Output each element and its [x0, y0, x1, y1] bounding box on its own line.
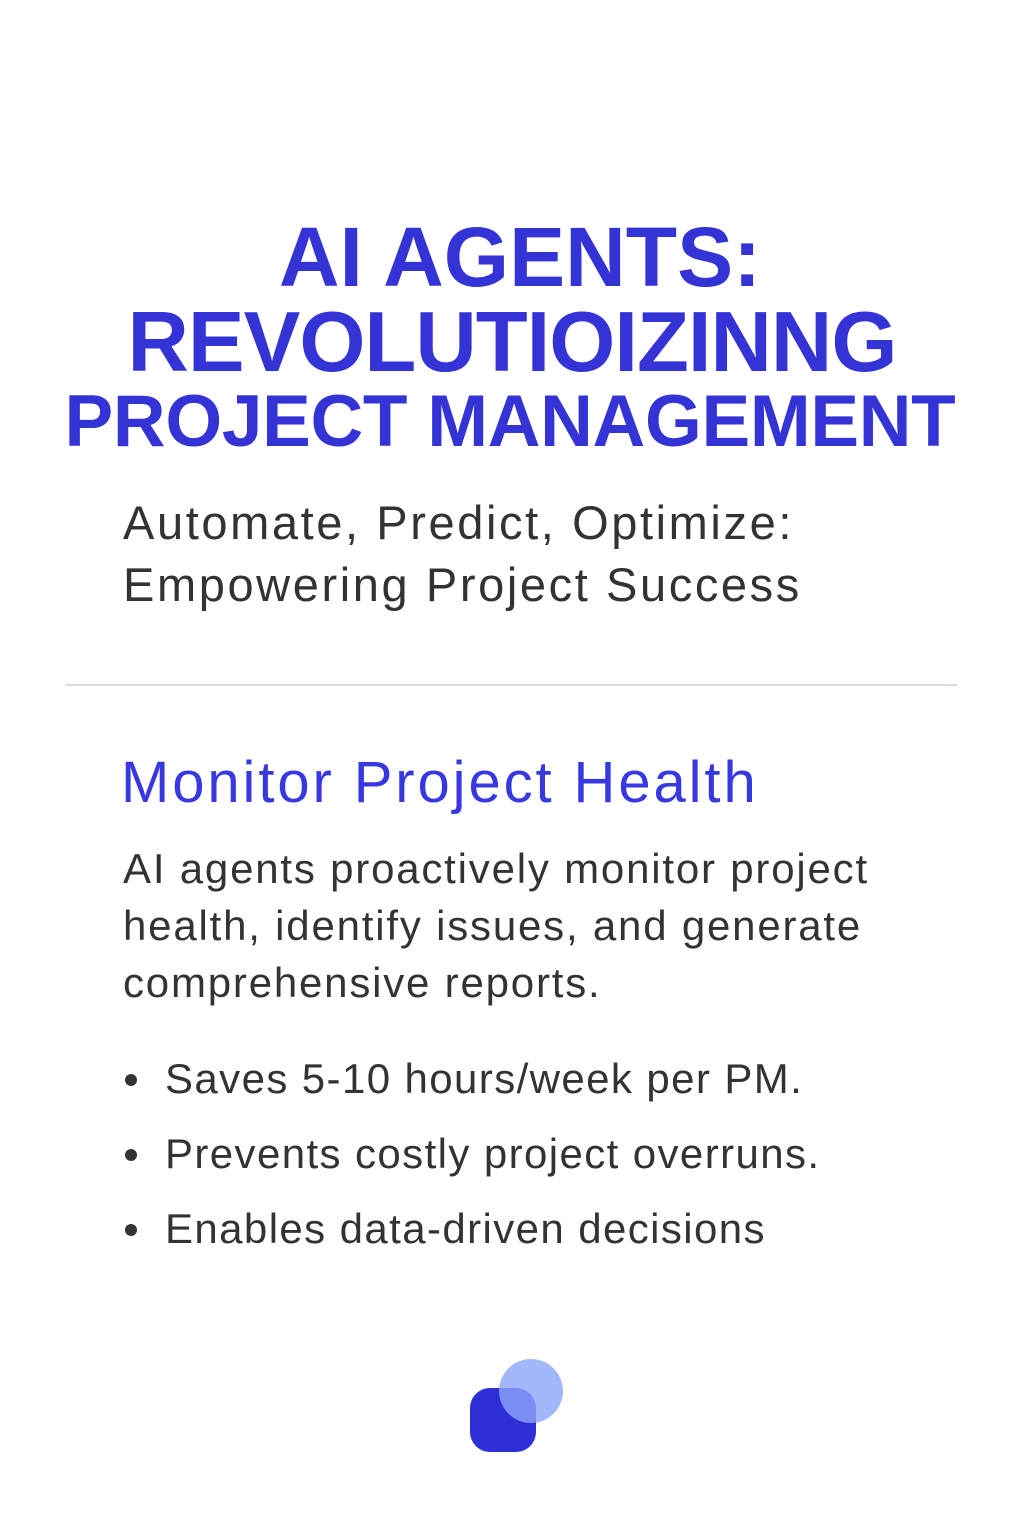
bullet list: Prevents costly project overruns.: [165, 1130, 820, 1177]
title: REVOLUTIOIZINNG: [128, 295, 896, 390]
subtitle: [123, 496, 802, 611]
icon: logo: [470, 1359, 563, 1452]
section heading: Monitor Project Health: [121, 750, 759, 815]
title: PROJECT MANAGEMENT: [65, 381, 955, 462]
title: [65, 210, 955, 462]
bullet list: Enables data-driven decisions: [165, 1205, 766, 1252]
bullet list: [125, 1055, 820, 1252]
subtitle: Automate, Predict, Optimize:: [123, 496, 794, 549]
title: AI AGENTS:: [279, 210, 761, 304]
bullet list: Saves 5-10 hours/week per PM.: [165, 1055, 803, 1102]
description: health, identify issues, and generate: [123, 902, 862, 949]
subtitle: Empowering Project Success: [123, 558, 802, 611]
description: [123, 845, 869, 1006]
description: AI agents proactively monitor project: [123, 845, 869, 892]
description: comprehensive reports.: [123, 959, 601, 1006]
